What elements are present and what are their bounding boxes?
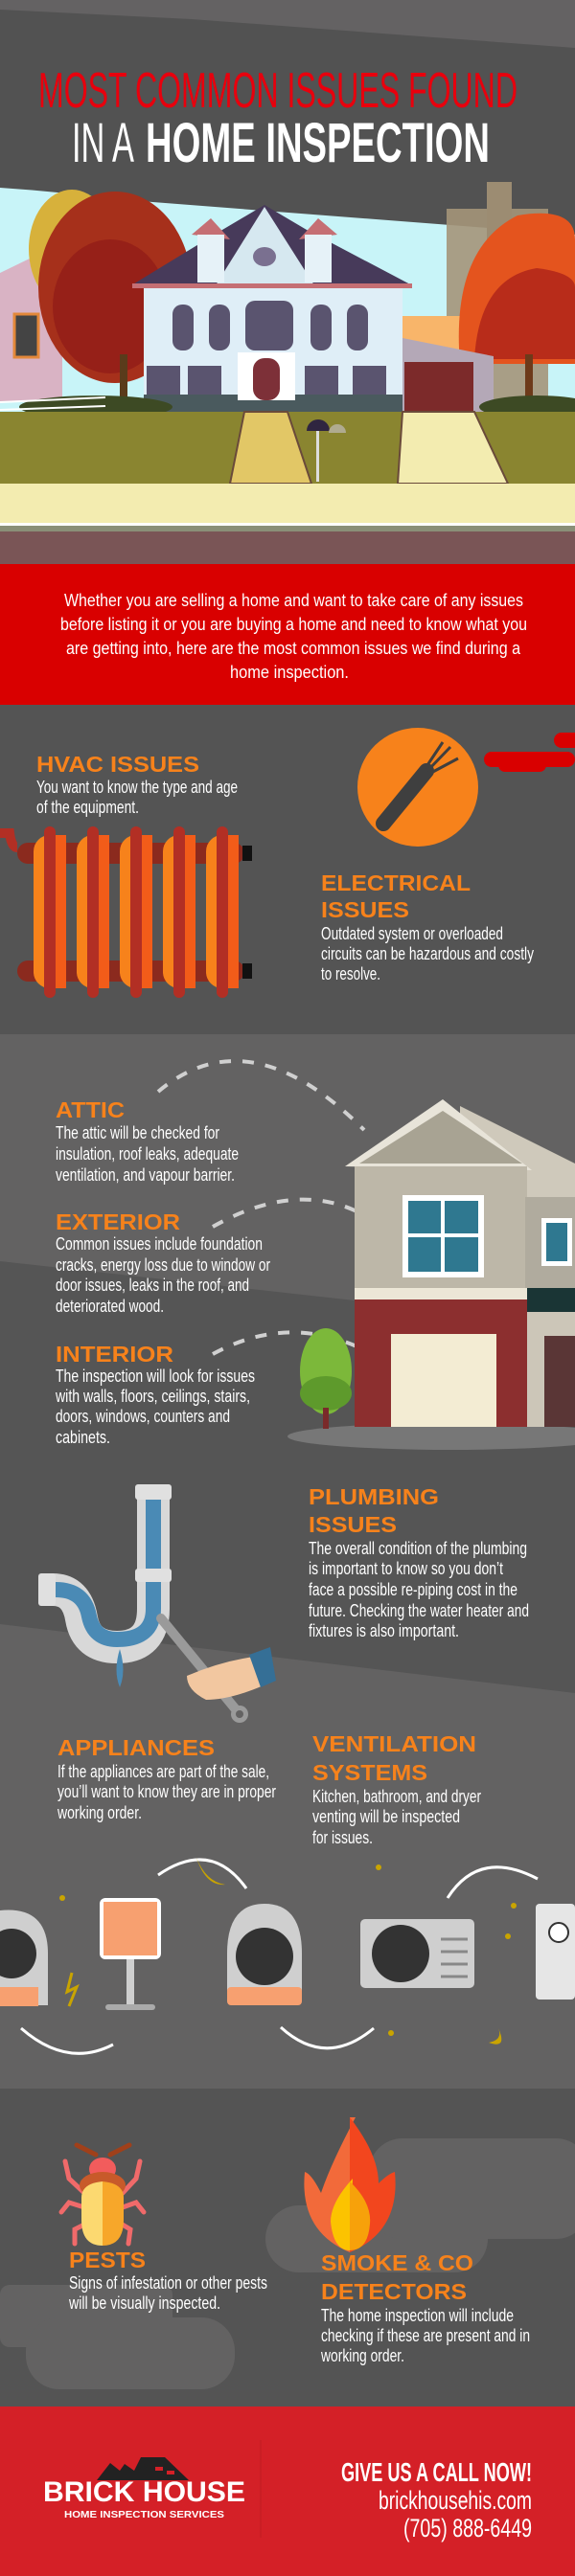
icon: heater left [0, 1910, 48, 2006]
text: attic: The attic will be checked for [56, 1123, 219, 1142]
footer [0, 2407, 575, 2576]
text: exterior: Common issues include foundation [56, 1234, 263, 1254]
icon: bug [61, 2145, 144, 2246]
text: interior: INTERIOR [56, 1342, 173, 1367]
text: interior: The inspection will look for issues [56, 1367, 255, 1386]
text: smoke & co detectors: working order. [320, 2346, 404, 2365]
text: ventilation systems: VENTILATION [312, 1731, 476, 1756]
text: HVAC issues: HVAC ISSUES [36, 752, 199, 777]
section 2 background [0, 1034, 575, 2089]
text: attic: ventilation, and vapour barrier. [56, 1165, 235, 1185]
appliances row [0, 1858, 575, 2053]
text: ventilation systems: SYSTEMS [312, 1760, 427, 1785]
title: IN A [72, 112, 134, 174]
icon: standing fan [100, 1898, 161, 2010]
logo: HOME INSPECTION SERVICES [64, 2510, 224, 2520]
text: pests: PESTS [69, 2248, 146, 2272]
mailbox [307, 419, 346, 482]
right tree [459, 214, 575, 402]
illustration: house [345, 1099, 575, 1427]
text: plumbing issues: is important to know so you don’t [309, 1559, 503, 1578]
contact info [341, 2457, 532, 2542]
text: exterior: deteriorated wood. [56, 1297, 164, 1316]
red decorative clouds [484, 733, 575, 772]
text: HVAC issues [36, 752, 238, 817]
text: HVAC issues: of the equipment. [36, 798, 139, 817]
text: plumbing issues: fixtures is also important. [309, 1621, 459, 1640]
title [38, 63, 518, 174]
intro red band [0, 564, 575, 705]
text: electrical issues: Outdated system or overloaded [321, 924, 503, 943]
intro red band: Whether you are selling a home and want to take care of any issues [64, 591, 523, 610]
text: pests [68, 2248, 267, 2313]
text: exterior: EXTERIOR [56, 1209, 180, 1234]
logo: BRICK HOUSE [43, 2476, 245, 2508]
text: pests: will be visually inspected. [68, 2294, 220, 2313]
icon: electrical cable [357, 728, 478, 847]
text: electrical issues: ISSUES [321, 897, 409, 922]
header background [0, 0, 575, 564]
main house [131, 205, 412, 412]
fence [0, 397, 105, 410]
text: electrical issues [321, 870, 534, 983]
text: pests: Signs of infestation or other pests [69, 2273, 267, 2293]
left trees [29, 190, 192, 402]
text: electrical issues: ELECTRICAL [321, 870, 471, 895]
arrows [21, 1860, 538, 2053]
text: ventilation systems: for issues. [312, 1828, 373, 1847]
text: appliances: working order. [57, 1803, 142, 1822]
intro red band: before listing it or you are buying a home and need to know what you [60, 615, 527, 634]
icon: plumbing pipe and wrench [38, 1484, 276, 1723]
text: exterior: cracks, energy loss due to window or [56, 1255, 270, 1275]
text: ventilation systems: venting will be inspected [312, 1807, 460, 1826]
text: smoke & co detectors: DETECTORS [321, 2279, 467, 2304]
text: attic: ATTIC [56, 1097, 125, 1122]
garage [388, 335, 494, 412]
section 1 background [0, 705, 575, 1034]
section 3 background [0, 2089, 575, 2407]
icon: radiator [0, 826, 252, 998]
text: ventilation systems [312, 1731, 481, 1847]
text: appliances: If the appliances are part of the sale, [58, 1762, 269, 1781]
icon: flame [304, 2117, 396, 2252]
text: smoke & co detectors: The home inspection will include [321, 2306, 514, 2325]
text: ventilation systems: Kitchen, bathroom, and dryer [312, 1787, 481, 1806]
icon: fan heater [227, 1904, 302, 2005]
text: exterior [56, 1209, 270, 1316]
lawn and paths [0, 412, 575, 484]
text: smoke & co detectors: SMOKE & CO [321, 2250, 473, 2275]
icon: green tree [300, 1328, 352, 1429]
text: plumbing issues: PLUMBING [309, 1484, 439, 1509]
dashed arcs [158, 1061, 422, 1389]
intro red band: home inspection. [230, 663, 349, 682]
intro red band: are getting into, here are the most common issues we find during a [66, 639, 521, 658]
text: interior: cabinets. [56, 1428, 110, 1447]
text: electrical issues: to resolve. [321, 964, 380, 983]
text: plumbing issues [309, 1484, 529, 1640]
text: attic: insulation, roof leaks, adequate [56, 1144, 239, 1164]
text: exterior: door issues, leaks in the roof, and [56, 1276, 249, 1295]
icon: boiler [536, 1904, 575, 2000]
text: HVAC issues: You want to know the type and age [36, 778, 238, 797]
illustration: house street scene [0, 182, 575, 564]
text: appliances: APPLIANCES [58, 1735, 215, 1760]
text: appliances: you’ll want to know they are in proper [58, 1782, 276, 1801]
text: attic [56, 1097, 239, 1185]
text: plumbing issues: face a possible re-piping cost in the [309, 1580, 518, 1599]
logo [43, 2457, 245, 2520]
text: plumbing issues: ISSUES [309, 1512, 397, 1537]
bushes [19, 395, 575, 418]
text: appliances [57, 1735, 276, 1822]
left pink house [0, 257, 62, 402]
text: interior: doors, windows, counters and [56, 1407, 230, 1426]
decorative yellow swooshes [59, 1858, 517, 2045]
text: interior: with walls, floors, ceilings, stairs, [55, 1387, 250, 1406]
icon: AC unit [360, 1919, 474, 1988]
text: interior [55, 1342, 255, 1447]
text: smoke & co detectors [320, 2250, 530, 2365]
